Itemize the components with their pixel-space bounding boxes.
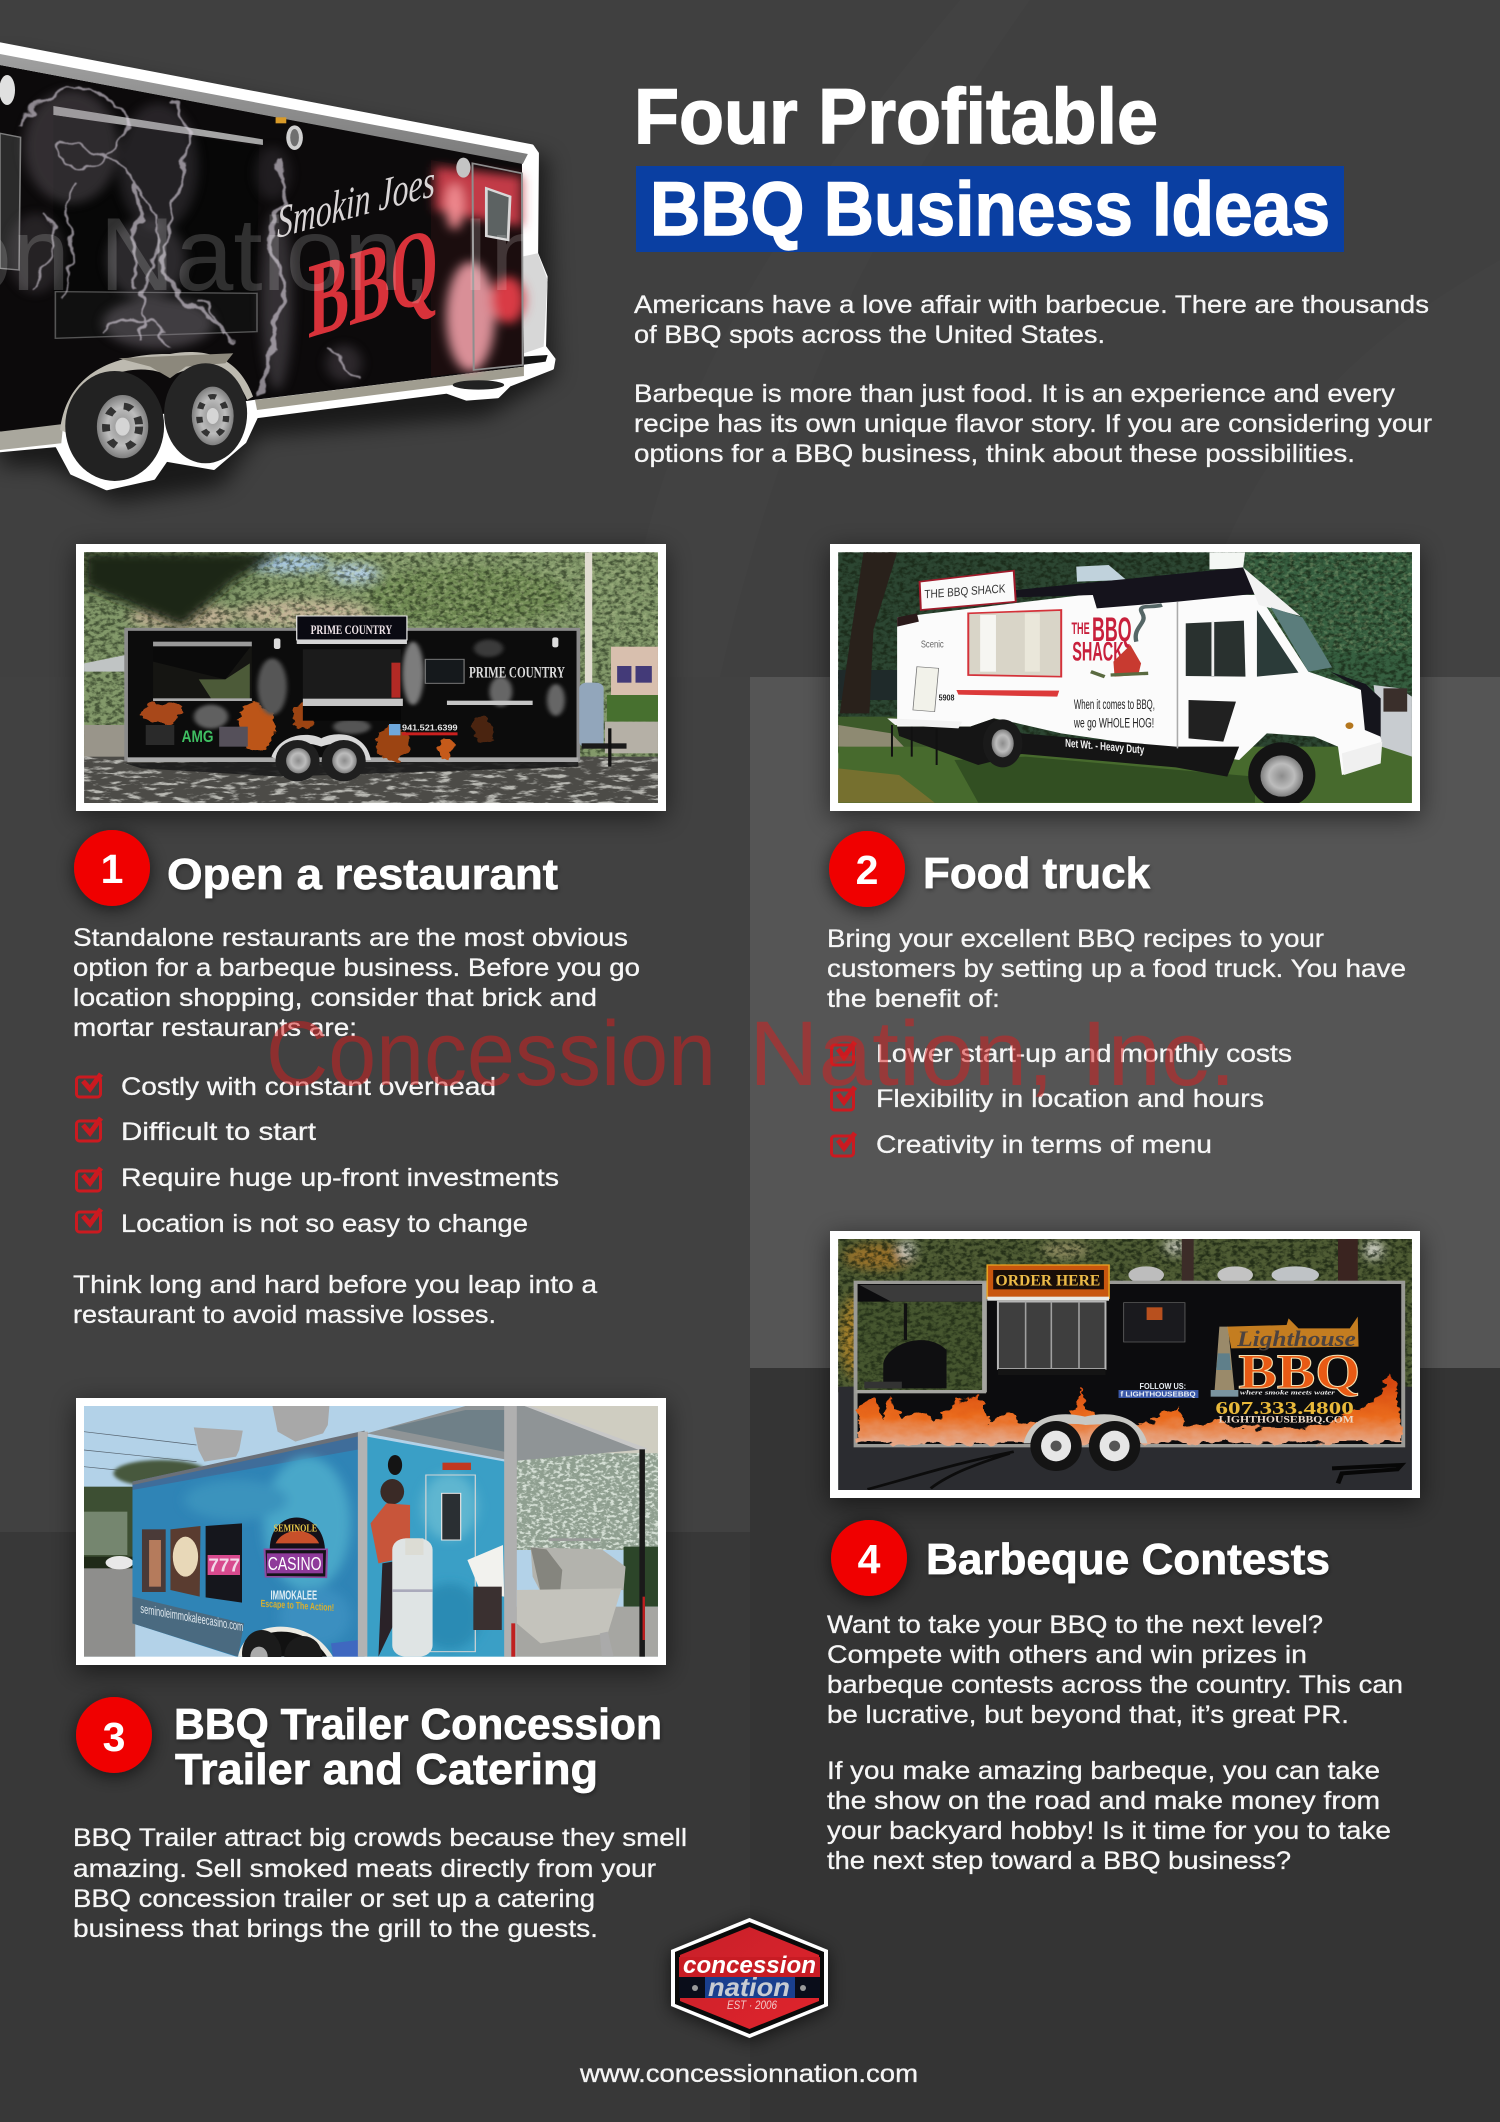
stainless grill xyxy=(531,1547,626,1592)
check icon xyxy=(832,1087,855,1110)
heading 3: BBQ Trailer Concession xyxy=(174,1700,662,1749)
photo: The BBQ Shack food truck: we go WHOLE HOG! xyxy=(1073,715,1154,731)
photo: Lighthouse BBQ trailer xyxy=(838,1239,1412,1490)
asphalt xyxy=(838,1387,1412,1490)
body text 4: be lucrative, but beyond that, it’s great PR. xyxy=(827,1701,1349,1729)
watermark: Nation, Inc. xyxy=(749,1003,1236,1105)
closing text 1: Think long and hard before you leap into a xyxy=(73,1271,597,1299)
intro text: recipe has its own unique flavor story. If you are considering your xyxy=(634,410,1432,438)
truck wrap lettering: Smokin Joes xyxy=(277,155,435,249)
intro text: Barbeque is more than just food. It is an experience and every xyxy=(634,380,1396,408)
truck wrap lettering xyxy=(277,155,438,361)
end wall window and lantern xyxy=(426,1475,475,1652)
heading 4: Barbeque Contests xyxy=(926,1535,1330,1584)
body text 1: option for a barbeque business. Before you go xyxy=(73,954,640,982)
body text 3 xyxy=(73,1824,687,1943)
logo: Concession Nation: nation xyxy=(708,1972,790,2002)
menu board and table xyxy=(913,667,939,712)
trailer end wall xyxy=(358,1432,368,1657)
body text 3: BBQ concession trailer or set up a catering xyxy=(73,1885,595,1913)
title highlight bar xyxy=(636,166,1344,252)
photo frame 2 xyxy=(830,544,1420,811)
title line 1: Four Profitable xyxy=(634,72,1158,160)
number badge 2: 2 xyxy=(856,847,878,893)
trailer side xyxy=(132,1432,365,1657)
truck wheels xyxy=(990,719,1020,768)
trailer xyxy=(126,629,578,760)
body text 4: the next step toward a BBQ business? xyxy=(827,1847,1291,1875)
service window and sign xyxy=(998,1302,1105,1369)
flames and smoke xyxy=(142,702,494,759)
red scene at trailer rear xyxy=(431,160,524,377)
body text 1 xyxy=(73,924,640,1042)
menu board xyxy=(1124,1303,1185,1342)
photo frame 3 xyxy=(76,1398,666,1665)
photo: The BBQ Shack food truck xyxy=(838,552,1412,808)
canopy xyxy=(367,1406,645,1461)
heading 3: Trailer and Catering xyxy=(175,1745,598,1794)
grass and path xyxy=(838,717,996,753)
woman figure xyxy=(380,1479,404,1504)
body text 4: If you make amazing barbeque, you can take xyxy=(827,1757,1380,1785)
number badge 3 xyxy=(76,1697,152,1773)
photo: Prime Country BBQ trailer xyxy=(84,552,658,803)
vent xyxy=(1076,565,1126,582)
body text 4: Want to take your BBQ to the next level? xyxy=(827,1611,1323,1639)
wheels and fender xyxy=(60,352,253,433)
body text 3: amazing. Sell smoked meats directly from your xyxy=(73,1855,656,1883)
body text 4: your backyard hobby! Is it time for you to take xyxy=(827,1817,1391,1845)
photo: Lighthouse BBQ trailer: Lighthouse xyxy=(1236,1327,1356,1351)
panel 2: food truck xyxy=(827,544,1420,1159)
checklist 1 xyxy=(76,1073,559,1238)
check icon xyxy=(76,1074,101,1097)
body text 4: barbeque contests across the country. This can xyxy=(827,1671,1403,1699)
photo: Seminole Casino trailer: IMMOKALEE xyxy=(270,1588,317,1602)
heading 2: Food truck xyxy=(923,849,1151,898)
photo: The BBQ Shack food truck: THE xyxy=(1071,619,1090,638)
photo: The BBQ Shack food truck: THE BBQ SHACK xyxy=(924,581,1006,601)
body text 4: Compete with others and win prizes in xyxy=(827,1641,1307,1669)
truck wrap lettering: BBQ xyxy=(308,202,438,361)
checklist 1: Difficult to start xyxy=(121,1118,316,1146)
photo: The BBQ Shack food truck: BBQ xyxy=(1092,611,1132,649)
body text 2 xyxy=(827,925,1406,1013)
photo: Prime Country BBQ trailer: 941.521.6399 xyxy=(402,724,458,732)
heading 1: Open a restaurant xyxy=(167,850,558,899)
photo: Lighthouse BBQ trailer: BBQ xyxy=(1238,1343,1360,1399)
number badge 4: 4 xyxy=(858,1536,881,1582)
sign and wrap lettering xyxy=(297,616,407,640)
number badge 1 xyxy=(74,830,150,906)
photo: Prime Country BBQ trailer: PRIME COUNTRY xyxy=(311,623,392,638)
photo: The BBQ Shack food truck: When it comes to BBQ, xyxy=(1074,697,1155,713)
ground xyxy=(84,757,658,803)
smoke xyxy=(8,90,362,390)
photo: Lighthouse BBQ trailer: LIGHTHOUSEBBQ.COM xyxy=(1219,1415,1354,1425)
number badge 3: 3 xyxy=(103,1714,125,1760)
body text 1: mortar restaurants are: xyxy=(73,1014,357,1042)
photo: Prime Country BBQ trailer: PRIME COUNTRY xyxy=(469,664,565,681)
flames xyxy=(858,1375,1401,1443)
truck body xyxy=(897,593,1381,775)
photo: Seminole Casino trailer: Escape to The Action! xyxy=(261,1598,334,1614)
service window awning xyxy=(53,106,263,145)
trailer shell xyxy=(856,1282,1403,1446)
parked car xyxy=(1374,685,1412,757)
photo: Lighthouse BBQ trailer: 607.333.4800 xyxy=(1215,1399,1354,1419)
wheels xyxy=(271,734,371,760)
heading 3 xyxy=(174,1700,662,1794)
casino logo xyxy=(270,1517,325,1550)
wheels xyxy=(1024,1414,1147,1443)
number badge 2 xyxy=(829,831,905,907)
photo: Seminole Casino trailer: 777 xyxy=(208,1555,240,1576)
body text 2: Bring your excellent BBQ recipes to your xyxy=(827,925,1324,953)
closing text 1: restaurant to avoid massive losses. xyxy=(73,1301,496,1329)
number badge 4 xyxy=(831,1520,907,1596)
checklist 1: Location is not so easy to change xyxy=(121,1210,528,1238)
hero image: Smokin Joes BBQ trailer xyxy=(0,44,630,503)
checklist 1: Costly with constant overhead xyxy=(121,1073,496,1101)
photo frame 4 xyxy=(830,1231,1420,1498)
logo: Concession Nation: EST · 2006 xyxy=(727,2000,778,2012)
photo: Lighthouse BBQ trailer: f LIGHTHOUSEBBQ xyxy=(1121,1390,1196,1398)
open porch xyxy=(858,1302,984,1391)
number badge 1: 1 xyxy=(101,846,123,892)
body text 4 xyxy=(827,1611,1403,1875)
intro text xyxy=(634,291,1432,468)
photo: Lighthouse BBQ trailer: ORDER HERE xyxy=(996,1272,1100,1289)
check icon xyxy=(76,1118,101,1141)
checklist 2: Flexibility in location and hours xyxy=(876,1085,1264,1113)
photo: Lighthouse BBQ trailer: where smoke meets water xyxy=(1240,1388,1335,1396)
body text 4: the show on the road and make money from xyxy=(827,1787,1380,1815)
photo: The BBQ Shack food truck: SHACK xyxy=(1072,638,1124,667)
cards xyxy=(467,1545,504,1597)
roof vents xyxy=(194,1427,243,1462)
logo: Concession Nation: concession xyxy=(683,1952,816,1979)
panel 3: BBQ trailer concession xyxy=(73,1398,687,1943)
hood and bumper xyxy=(1330,672,1381,737)
check icon xyxy=(76,1209,101,1232)
body text 2: customers by setting up a food truck. You have xyxy=(827,955,1406,983)
watermark: Concession xyxy=(266,1003,716,1105)
background trees and pavement xyxy=(84,1487,135,1567)
checklist 2: Creativity in terms of menu xyxy=(876,1131,1212,1159)
photo: The BBQ Shack food truck: 5908 xyxy=(939,693,954,703)
title xyxy=(634,72,1344,252)
photo: Seminole Casino trailer: seminoleimmokaleecasino.com xyxy=(140,1601,243,1634)
panel 4: barbeque contests xyxy=(827,1231,1420,1875)
propane tank and hitch xyxy=(579,683,604,748)
vents xyxy=(1128,1266,1164,1284)
check icon xyxy=(832,1042,855,1065)
photo frame 1 xyxy=(76,544,666,811)
checklist 2 xyxy=(832,1040,1292,1159)
closing text 1 xyxy=(73,1271,597,1329)
intro text: options for a BBQ business, think about these possibilities. xyxy=(634,440,1355,468)
panel 1: open a restaurant xyxy=(73,544,666,1329)
intro text: Americans have a love affair with barbecue. There are thousands xyxy=(634,291,1429,319)
roof sign xyxy=(920,571,1016,610)
intro text: of BBQ spots across the United States. xyxy=(634,321,1105,349)
body text 1: location shopping, consider that brick and xyxy=(73,984,597,1012)
lighthouse logo xyxy=(1215,1327,1234,1390)
photo: Seminole Casino trailer: SEMINOLE xyxy=(274,1523,317,1534)
service window and shelf xyxy=(968,610,1061,677)
checklist 1: Require huge up-front investments xyxy=(121,1164,559,1192)
logo: Concession Nation xyxy=(671,1918,828,2038)
photo: The BBQ Shack food truck: Scenic xyxy=(921,639,944,650)
photo: Prime Country BBQ trailer: AMG xyxy=(182,727,213,746)
propane tank xyxy=(392,1538,433,1657)
watermark xyxy=(266,1003,1236,1105)
photo: The BBQ Shack food truck: Net Wt. - Heavy Duty xyxy=(1065,737,1144,756)
photo: Seminole Casino trailer xyxy=(84,1406,658,1677)
trailer white outline xyxy=(0,44,554,489)
trailer body xyxy=(0,65,524,432)
wheel arch xyxy=(238,1627,333,1657)
title line 2: BBQ Business Ideas xyxy=(650,167,1330,252)
body text 3: BBQ Trailer attract big crowds because they smell xyxy=(73,1824,687,1852)
windows xyxy=(153,645,252,700)
body text 1: Standalone restaurants are the most obvious xyxy=(73,924,628,952)
checklist 2: Lower start-up and monthly costs xyxy=(876,1040,1292,1068)
photo: Seminole Casino trailer: CASINO xyxy=(268,1554,321,1575)
check icon xyxy=(832,1133,855,1156)
body text 2: the benefit of: xyxy=(827,985,1000,1013)
social block: FOLLOW US: xyxy=(1139,1382,1186,1391)
website url: www.concessionnation.com xyxy=(579,2060,918,2088)
body text 3: business that brings the grill to the guests. xyxy=(73,1915,598,1943)
check icon xyxy=(76,1168,101,1191)
